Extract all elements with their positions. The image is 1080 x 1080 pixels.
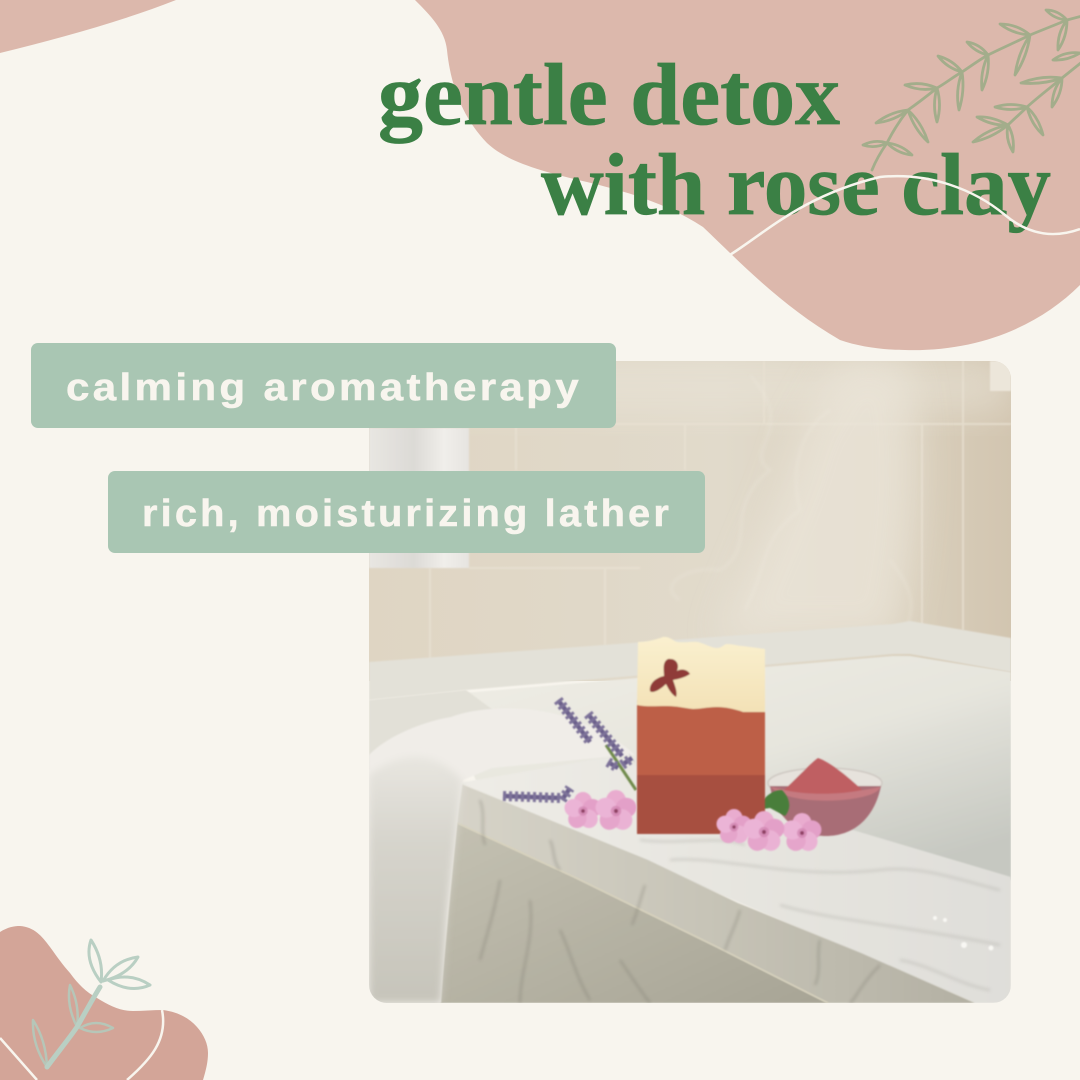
- photo marble groove: [457, 823, 828, 1003]
- icon: mint sprig bottom left: [33, 940, 150, 1067]
- photo leaf: [764, 789, 790, 816]
- photo marble ledge lip: [457, 783, 975, 1003]
- photo marble veins: [480, 800, 880, 1003]
- photo geranium flowers right: [714, 809, 824, 855]
- callout: calming aromatherapy: calming aromatherapy: [66, 367, 582, 409]
- photo steam wisps: [671, 375, 911, 630]
- photo tub interior: [440, 656, 1011, 880]
- photo tub rim: [369, 621, 1011, 700]
- photo marble ledge top: [459, 757, 1011, 1003]
- photo ledge left top: [369, 690, 489, 754]
- photo: soap on marble bath ledge: [369, 361, 1011, 1003]
- photo towel hanging: [369, 428, 469, 568]
- callout: rich, moisturizing lather: [108, 471, 705, 553]
- title: with rose clay: [541, 137, 1051, 234]
- blob: top left corner: [0, 0, 176, 53]
- callout: rich, moisturizing lather: rich, moisturizing lather: [142, 493, 672, 535]
- icon: leafy branch top right: [863, 10, 1080, 170]
- photo soap bar: [637, 637, 765, 834]
- photo wall tiles: [369, 361, 1011, 681]
- photo lavender sprigs: [503, 700, 636, 800]
- title: gentle detox: [378, 47, 840, 144]
- callout: calming aromatherapy: [31, 343, 616, 428]
- white curve line: [725, 176, 1080, 258]
- photo steam: [741, 364, 920, 633]
- photo marble top veins: [640, 840, 1000, 990]
- photo towel: [369, 708, 635, 1003]
- title: [378, 47, 1051, 234]
- blob: top right: [415, 0, 1080, 350]
- photo geranium flowers left: [564, 790, 638, 830]
- photo water droplets: [933, 916, 994, 950]
- white lines on bottom blob: [0, 1010, 163, 1080]
- photo marble ledge face: [440, 823, 828, 1003]
- blob: bottom left: [0, 926, 208, 1080]
- photo bowl of rose clay: [768, 758, 882, 836]
